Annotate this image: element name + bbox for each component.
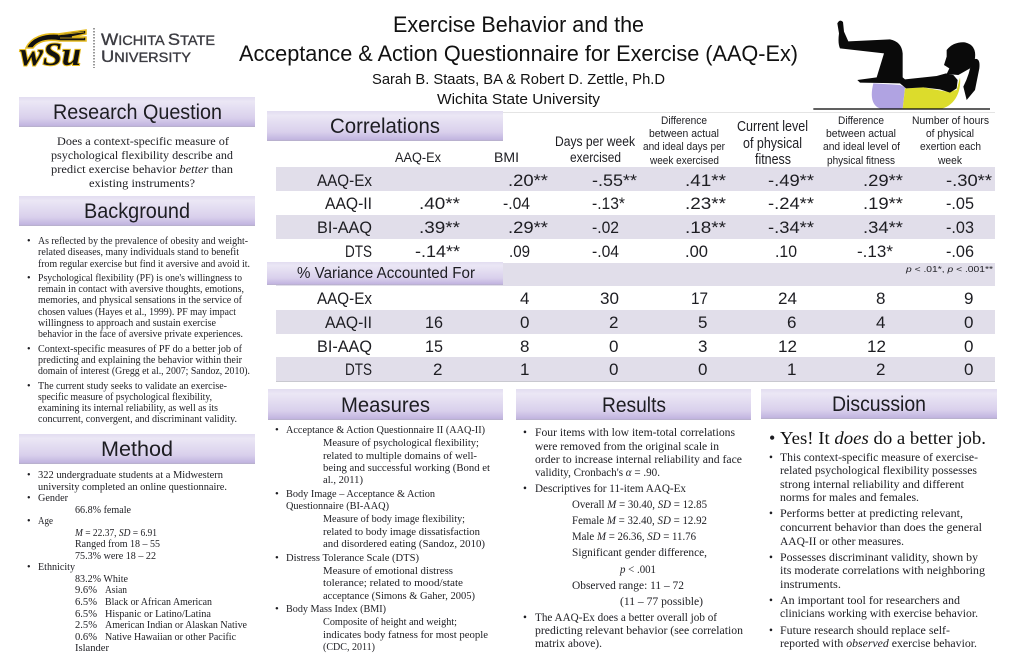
text: method details: 66.8% female [75,505,131,516]
text: measures list: Measure of emotional distress [323,565,453,577]
text: method details: 9.6% [75,585,98,596]
column headers [395,115,989,168]
variance row: AAQ-II: 5 [698,313,707,332]
text: background bullets: chosen values (Hayes et al., 1999). PF may impact [38,307,236,318]
text: background bullets: examining its internal reliability, as well as its [38,403,218,414]
variance row: AAQ-II: 2 [609,313,618,332]
text: research question: predict exercise behavior better than [51,164,233,176]
column headers: and ideal level of [823,141,901,153]
variance row: AAQ-II: 6 [787,313,796,332]
text: method details: • [27,493,31,504]
column headers: and ideal days per [643,141,725,153]
correlation row: DTS: .09 [509,242,530,261]
text: method details: Gender [38,493,69,504]
heading: correlations [267,111,503,141]
column headers: exercised [570,150,621,165]
text: measures list: Distress Tolerance Scale (DTS) [286,552,419,564]
text: measures list: Questionnaire (BI-AAQ) [286,500,389,512]
text: discussion list: its moderate correlations with neighboring [780,565,985,577]
correlation row: DTS: -.13* [857,242,893,261]
heading: measures [268,389,503,420]
text: discussion list: clinicians working with exercise behavior. [780,608,978,620]
text: discussion list [769,452,985,650]
text: background bullets: • [27,381,31,392]
text: background bullets [27,236,250,425]
text: method details: Islander [75,643,110,654]
title [239,12,798,88]
variance row: AAQ-Ex: 4 [520,289,529,308]
text: background bullets: concurrent, convergent, and discriminant validity. [38,414,237,425]
correlation row: AAQ-II: .23** [685,194,726,213]
variance row: AAQ-II: AAQ-II [325,313,372,332]
heading: percent variance accounted for: % Variance Accounted For [297,265,475,282]
text: measures list: Measure of body image flexibility; [323,513,465,525]
column headers: BMI [494,150,519,165]
wordmark: UNIVERSITY [101,47,191,66]
correlation row: AAQ-II: .40** [419,194,460,213]
panel: research question [19,97,255,190]
correlation row: BI-AAQ: -.34** [768,218,814,237]
text: method details: 2.5% [75,620,98,631]
text: measures list: • [275,488,279,500]
variance row: DTS: DTS [345,360,372,379]
text: method details: 322 undergraduate students at a Midwestern [38,470,223,481]
variance row: AAQ-II [325,313,973,332]
column headers: Difference [838,115,884,127]
correlation row: AAQ-Ex: .20** [508,171,548,190]
text: method details: Ethnicity [38,562,76,573]
variance row: BI-AAQ: 15 [425,337,443,356]
text: background bullets: Context-specific measures of PF do a better job of [38,344,243,355]
correlation row: AAQ-Ex: -.55** [592,171,637,190]
affiliation: Wichita State University [437,91,601,108]
text: method details: Age [38,516,53,527]
variance row: BI-AAQ: 12 [867,337,886,356]
variance row: BI-AAQ [317,337,973,356]
wordmark [101,30,215,66]
variance row: AAQ-Ex: 17 [691,289,708,308]
correlation row: BI-AAQ: .29** [508,218,548,237]
table rules and stripes [276,112,995,382]
variance row: AAQ-Ex: 8 [876,289,885,308]
callout: yes it does do a better job: Yes! It does do a better job. [780,428,986,448]
correlation row: DTS: -.04 [592,242,619,261]
text: discussion list: Performs better at predicting relevant, [780,508,963,520]
text: results list: Overall M = 30.40, SD = 12.85 [572,499,707,511]
heading: method [19,434,255,464]
text: results list: validity, Cronbach's α = .90. [535,467,660,479]
text: background bullets: specific measure of psychological flexibility, [38,392,212,403]
icon: WSU wheat mark: wSu [20,37,81,73]
column headers: Current level [737,119,808,135]
text: background bullets: remain in contact with aversive thoughts, emotions, [38,284,244,295]
correlation row: BI-AAQ: -.02 [592,218,619,237]
variance row: AAQ-Ex: AAQ-Ex [317,289,372,308]
text: measures list: • [275,603,279,615]
panel: measures [268,389,503,653]
text: measures list: Body Image – Acceptance & Action [286,488,436,500]
text: method details: Black or African American [105,597,212,608]
variance row: BI-AAQ: 12 [778,337,797,356]
column headers: of physical [743,136,802,152]
correlation row: BI-AAQ: .34** [863,218,903,237]
correlation row: DTS: DTS [345,242,372,261]
text: background bullets: from regular exercise but find it aversive and avoid it. [38,259,250,270]
variance row: AAQ-Ex: 9 [964,289,973,308]
correlation row: AAQ-Ex: .41** [685,171,726,190]
heading: results: Results [602,393,666,417]
variance row: DTS: 0 [609,360,618,379]
text: measures list: acceptance (Simons & Gaher, 2005) [323,590,475,602]
text: background bullets: domain of interest (Gregg et al., 2007; Sandoz, 2010). [38,366,250,377]
text: measures list: • [275,552,279,564]
text: research question: psychological flexibility describe and [51,150,233,162]
column headers: week [937,155,962,167]
correlation row: AAQ-II: AAQ-II [325,194,372,213]
text: method details [27,470,247,654]
column headers: week exercised [649,155,719,167]
text: background bullets: • [27,273,31,284]
heading: correlations: Correlations [330,114,440,138]
variance row: BI-AAQ: 0 [964,337,973,356]
text: method details: M = 22.37, SD = 6.91 [74,528,157,539]
correlation row: AAQ-Ex: -.49** [768,171,814,190]
variance row: AAQ-Ex [317,289,973,308]
panel: method [19,434,255,654]
text: method details: university completed an online questionnaire. [38,482,227,493]
text: results list: The AAQ-Ex does a better overall job of [535,612,717,624]
text: results list: order to increase internal reliability and face [535,454,742,466]
heading: background [19,196,255,226]
text: background bullets: related diseases, many individuals stand to benefit [38,247,239,258]
text: background bullets: • [27,344,31,355]
authors: Sarah B. Staats, BA & Robert D. Zettle, Ph.D [372,71,665,88]
correlation row: BI-AAQ: BI-AAQ [317,218,372,237]
panel: background [19,196,255,425]
text: background bullets: behavior in the face of aversive private experiences. [38,329,243,340]
text: method details: • [27,470,31,481]
significance note: p < .01*, p < .001** [905,264,994,274]
text: method details: Ranged from 18 – 55 [75,539,160,550]
text: measures list: related to body image dissatisfaction [323,526,481,538]
text: discussion list: AAQ-II or other measures. [780,536,904,548]
variance row: BI-AAQ: 8 [520,337,529,356]
title: Acceptance & Action Questionnaire for Exercise (AAQ-Ex) [239,41,798,66]
text: method details: • [27,562,31,573]
variance row: DTS: 1 [787,360,796,379]
variance row: DTS: 0 [964,360,973,379]
correlation row: AAQ-Ex: .29** [863,171,903,190]
text: results list: Female M = 32.40, SD = 12.92 [572,515,707,527]
variance row: AAQ-II: 16 [425,313,443,332]
correlation row: AAQ-II: -.24** [768,194,814,213]
text: discussion list: Possesses discriminant validity, shown by [780,552,978,564]
text: measures list: Composite of height and weight; [323,616,457,628]
correlation row: AAQ-Ex: -.30** [946,171,992,190]
text: measures list: (CDC, 2011) [323,641,375,653]
text: results list: • [523,427,527,439]
column headers: physical fitness [827,155,895,167]
variance row: BI-AAQ: 3 [698,337,707,356]
text: results list: Male M = 26.36, SD = 11.76 [572,531,696,543]
correlation row: BI-AAQ [317,218,974,237]
heading: results [516,389,751,420]
correlation row: DTS: .10 [775,242,797,261]
text: results list: Significant gender difference, [572,547,707,559]
text: results list [523,427,743,650]
correlation row: AAQ-II [325,194,974,213]
text: method details: American Indian or Alaskan Native [105,620,247,631]
correlation row: DTS: -.14** [415,242,460,261]
text: measures list: tolerance; related to mood/state [323,577,463,589]
column headers: of physical [926,128,974,140]
correlation row: BI-AAQ: -.03 [946,218,974,237]
text: discussion list: reported with observed exercise behavior. [780,638,977,650]
text: measures list: being and successful working (Bond et [323,462,490,474]
text: background bullets: The current study seeks to validate an exercise- [38,381,228,392]
variance row: AAQ-II: 0 [520,313,529,332]
correlation row: DTS: .00 [685,242,708,261]
heading: percent variance accounted for [267,262,503,285]
text: method details: Native Hawaiian or other Pacific [105,632,236,643]
logo: Wichita State University [20,28,215,73]
text: discussion list: strong internal reliability and different [780,479,965,491]
correlation row: DTS: -.06 [946,242,974,261]
variance row: DTS [345,360,973,379]
text: measures list: indicates body fatness for most people [323,629,488,641]
column headers: Difference [661,115,707,127]
text: discussion list: • [769,625,773,637]
text: discussion list: An important tool for researchers and [780,595,960,607]
text: discussion list: norms for males and females. [780,492,919,504]
text: results list: • [523,483,527,495]
correlation row: AAQ-Ex [317,171,992,190]
text: discussion list: concurrent behavior than does the general [780,522,982,534]
heading: method: Method [101,437,173,461]
variance row: AAQ-II: 0 [964,313,973,332]
column headers: AAQ-Ex [395,150,441,165]
text: background bullets: • [27,236,31,247]
correlation row: BI-AAQ: .39** [419,218,460,237]
text: discussion list: • [769,552,773,564]
text: measures list: related to multiple domains of well- [323,450,477,462]
text: measures list [275,424,490,653]
heading: discussion [761,389,997,419]
correlation row: AAQ-II: .19** [863,194,903,213]
text: discussion list: related psychological flexibility possesses [780,465,977,477]
text: results list: p < .001 [619,564,656,576]
variance row: DTS: 0 [698,360,707,379]
panel: discussion [761,389,997,650]
variance row: BI-AAQ: 0 [609,337,618,356]
text: background bullets: predicting and explaining the behavior within their [38,355,243,366]
text: results list: predicting relevant behavior (see correlation [535,625,743,637]
text: method details: • [27,516,31,527]
variance row: AAQ-Ex: 30 [600,289,619,308]
heading: research question: Research Question [53,100,222,124]
text: method details: Hispanic or Latino/Latina [105,609,211,620]
text: discussion list: • [769,508,773,520]
text: discussion list: Future research should replace self- [780,625,950,637]
text: research question: Does a context-specific measure of [57,136,229,148]
variance row: DTS: 2 [876,360,885,379]
text: method details: 6.5% [75,597,98,608]
text: method details: Asian [105,585,127,596]
text: measures list: Body Mass Index (BMI) [286,603,386,615]
text: research question: existing instruments? [89,178,195,190]
correlation row: DTS [345,242,974,261]
wordmark: WICHITA STATE [101,30,215,49]
text: results list: Descriptives for 11-item AAQ-Ex [535,483,686,495]
text: results list: were removed from the original scale in [535,441,719,453]
text: method details: 75.3% were 18 – 22 [75,551,156,562]
text: measures list: • [275,424,279,436]
column headers: between actual [649,128,719,140]
text: method details: 0.6% [75,632,98,643]
callout: yes it does do a better job: • [769,428,775,448]
text: discussion list: instruments. [780,579,841,591]
text: background bullets: Psychological flexibility (PF) is one's willingness to [38,273,242,284]
correlation row: AAQ-II: -.04 [503,194,530,213]
heading: background: Background [84,199,190,223]
column headers: between actual [826,128,896,140]
column headers: Number of hours [912,115,989,127]
heading: measures: Measures [341,393,430,417]
column headers: Days per week [555,134,635,149]
panel: results [516,389,751,650]
correlation row: AAQ-Ex: AAQ-Ex [317,171,372,190]
variance row: DTS: 2 [433,360,442,379]
text: discussion list: • [769,595,773,607]
text: method details: 6.5% [75,609,98,620]
heading: research question [19,97,255,127]
text: measures list: and disordered eating (Sandoz, 2010) [323,538,485,550]
variance row: BI-AAQ: BI-AAQ [317,337,372,356]
correlation row: AAQ-II: -.13* [592,194,625,213]
wordmark divider [93,28,95,68]
column headers: exertion each [920,141,981,153]
correlation row: BI-AAQ: .18** [685,218,726,237]
heading: discussion: Discussion [832,392,926,416]
text: results list: Four items with low item-total correlations [535,427,735,439]
text: results list: Observed range: 11 – 72 [572,580,684,592]
text: results list: (11 – 77 possible) [620,596,703,608]
text: measures list: Measure of psychological flexibility; [323,437,479,449]
text: discussion list: • [769,452,773,464]
variance row: AAQ-II: 4 [876,313,885,332]
text: background bullets: willingness to approach and sustain exercise [38,318,216,329]
text: measures list: al., 2011) [323,474,363,486]
text: background bullets: memories, and physical sensations in the service of [38,295,243,306]
icon: exercise figure doing crunches on a ball [813,21,990,110]
text: measures list: Acceptance & Action Questionnaire II (AAQ-II) [286,424,485,436]
variance row: AAQ-Ex: 24 [778,289,797,308]
text: research question [51,136,233,190]
text: results list: • [523,612,527,624]
column headers: fitness [755,152,791,168]
variance row: DTS: 1 [520,360,529,379]
text: results list: matrix above). [535,638,602,650]
text: discussion list: This context-specific measure of exercise- [780,452,978,464]
text: background bullets: As reflected by the prevalence of obesity and weight- [38,236,249,247]
title: Exercise Behavior and the [393,12,644,37]
panel: correlations table [267,111,994,274]
correlation row: AAQ-II: -.05 [946,194,974,213]
panel: percent variance table [267,262,973,379]
text: method details: 83.2% White [75,574,128,585]
